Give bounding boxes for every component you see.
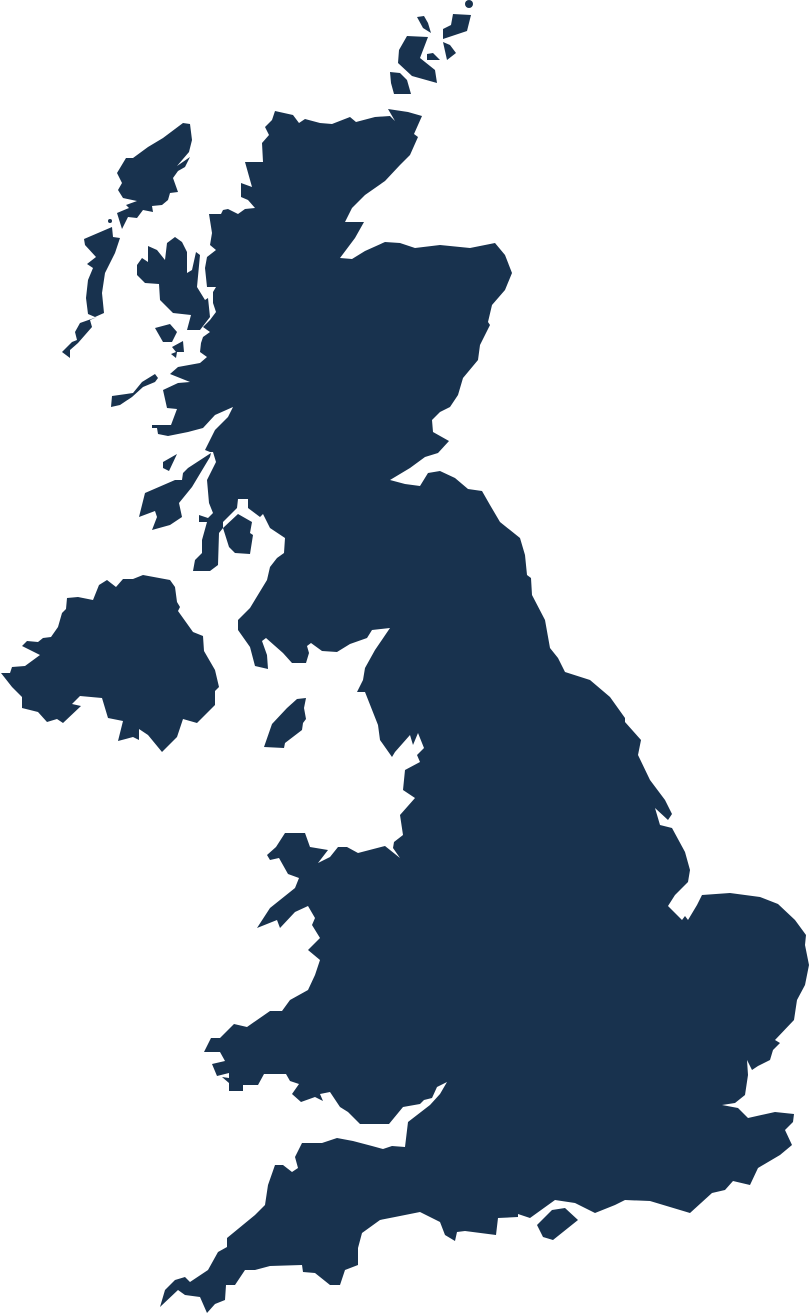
Orkney and Shetland islands xyxy=(390,0,473,94)
Mull xyxy=(111,374,158,407)
Skye xyxy=(137,237,210,330)
Isle of Wight xyxy=(537,1208,578,1240)
Isle of Man xyxy=(264,698,306,748)
Arran xyxy=(223,514,253,554)
Lewis and Harris xyxy=(117,123,192,229)
islet xyxy=(108,219,112,223)
Colonsay xyxy=(163,454,177,471)
Uist xyxy=(84,227,120,317)
Barra xyxy=(62,317,97,358)
Rum xyxy=(155,324,177,342)
Islay and Jura xyxy=(139,453,211,530)
Great Britain mainland xyxy=(152,109,809,1313)
Northern Ireland xyxy=(1,575,219,752)
Eigg xyxy=(171,341,184,358)
